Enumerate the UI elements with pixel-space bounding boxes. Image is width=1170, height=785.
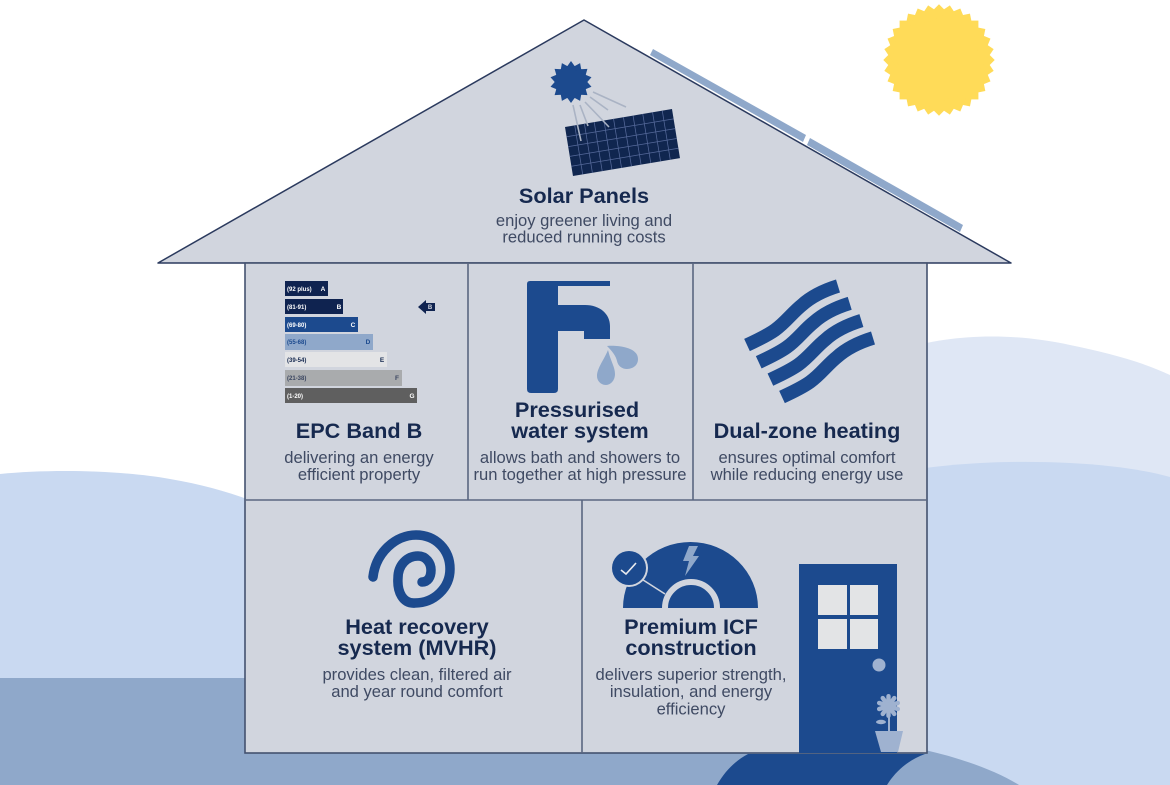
chart: EPC rating bars: (55-68) [287,340,306,346]
chart: EPC rating bars: (21-38) [287,376,306,382]
chart: EPC rating bars: A [321,286,326,293]
icon: flower pot [875,694,903,752]
icon: heating waves [747,286,873,397]
panel: heat recovery [322,535,512,701]
icon: ICF dome [610,542,758,608]
icon: rating arrow [418,300,435,314]
panel: dual-zone heating [710,286,903,484]
panel: pressurised water [473,281,687,484]
roof [158,20,1011,263]
chart: EPC rating bars: G [409,393,415,400]
panel: EPC band [284,281,435,484]
chart: EPC rating bars: (92 plus) [287,287,312,293]
text: heating description: ensures optimal comfort [718,448,896,467]
chart: EPC rating bars [285,281,417,403]
heading: ICF construction: Premium ICF [624,614,758,639]
panel: ICF construction [596,542,786,718]
text: EPC description: delivering an energy [284,448,434,467]
room dividers [245,263,927,753]
chart: EPC rating bars: (81-91) [287,305,306,311]
chart: EPC rating bars: B [337,304,342,311]
chart: EPC rating bars: D [366,339,371,346]
heading: pressurised water: water system [510,418,649,443]
icon: rating arrow: B [428,305,433,311]
chart: EPC rating bars: (39-54) [287,358,306,364]
text: MVHR description: and year round comfort [331,682,503,701]
text: solar description: enjoy greener living and [496,211,672,230]
icon: spiral [373,535,450,603]
heading: heat recovery: Heat recovery [345,614,489,639]
sun [883,4,995,116]
heading: solar panels: Solar Panels [519,183,649,208]
text: MVHR description: provides clean, filtered air [322,665,512,684]
text: water description: allows bath and showers to [480,448,680,467]
heading: ICF construction: construction [625,635,757,660]
landscape background [0,336,1170,785]
front door [799,564,897,753]
garden path [717,754,925,785]
text: water description: run together at high pressure [473,465,687,484]
heading: dual-zone heating: Dual-zone heating [714,418,900,443]
heading: EPC band: EPC Band B [296,418,422,443]
heading: pressurised water: Pressurised [515,397,639,422]
text: ICF description: efficiency [657,700,726,718]
chart: EPC rating bars: C [351,322,356,329]
text: solar description: reduced running costs [502,228,666,246]
icon: solar panel [545,57,680,176]
text: heating description: while reducing energy use [710,465,903,484]
chart: EPC rating bars: E [380,357,385,364]
text: ICF description: delivers superior strength, [596,665,786,684]
door knob [872,658,886,672]
house body [245,263,927,753]
heading: heat recovery: system (MVHR) [337,635,497,660]
chart: EPC rating bars: (69-80) [287,323,306,329]
chart: EPC rating bars: F [395,375,399,382]
panel: solar panels [496,57,680,246]
chart: EPC rating bars: (1-20) [287,394,303,400]
text: EPC description: efficient property [298,465,421,484]
roof panels on the outer slope [650,49,963,232]
text: ICF description: insulation, and energy [610,682,773,701]
door window [818,585,878,649]
icon: tap with drops [527,281,638,393]
